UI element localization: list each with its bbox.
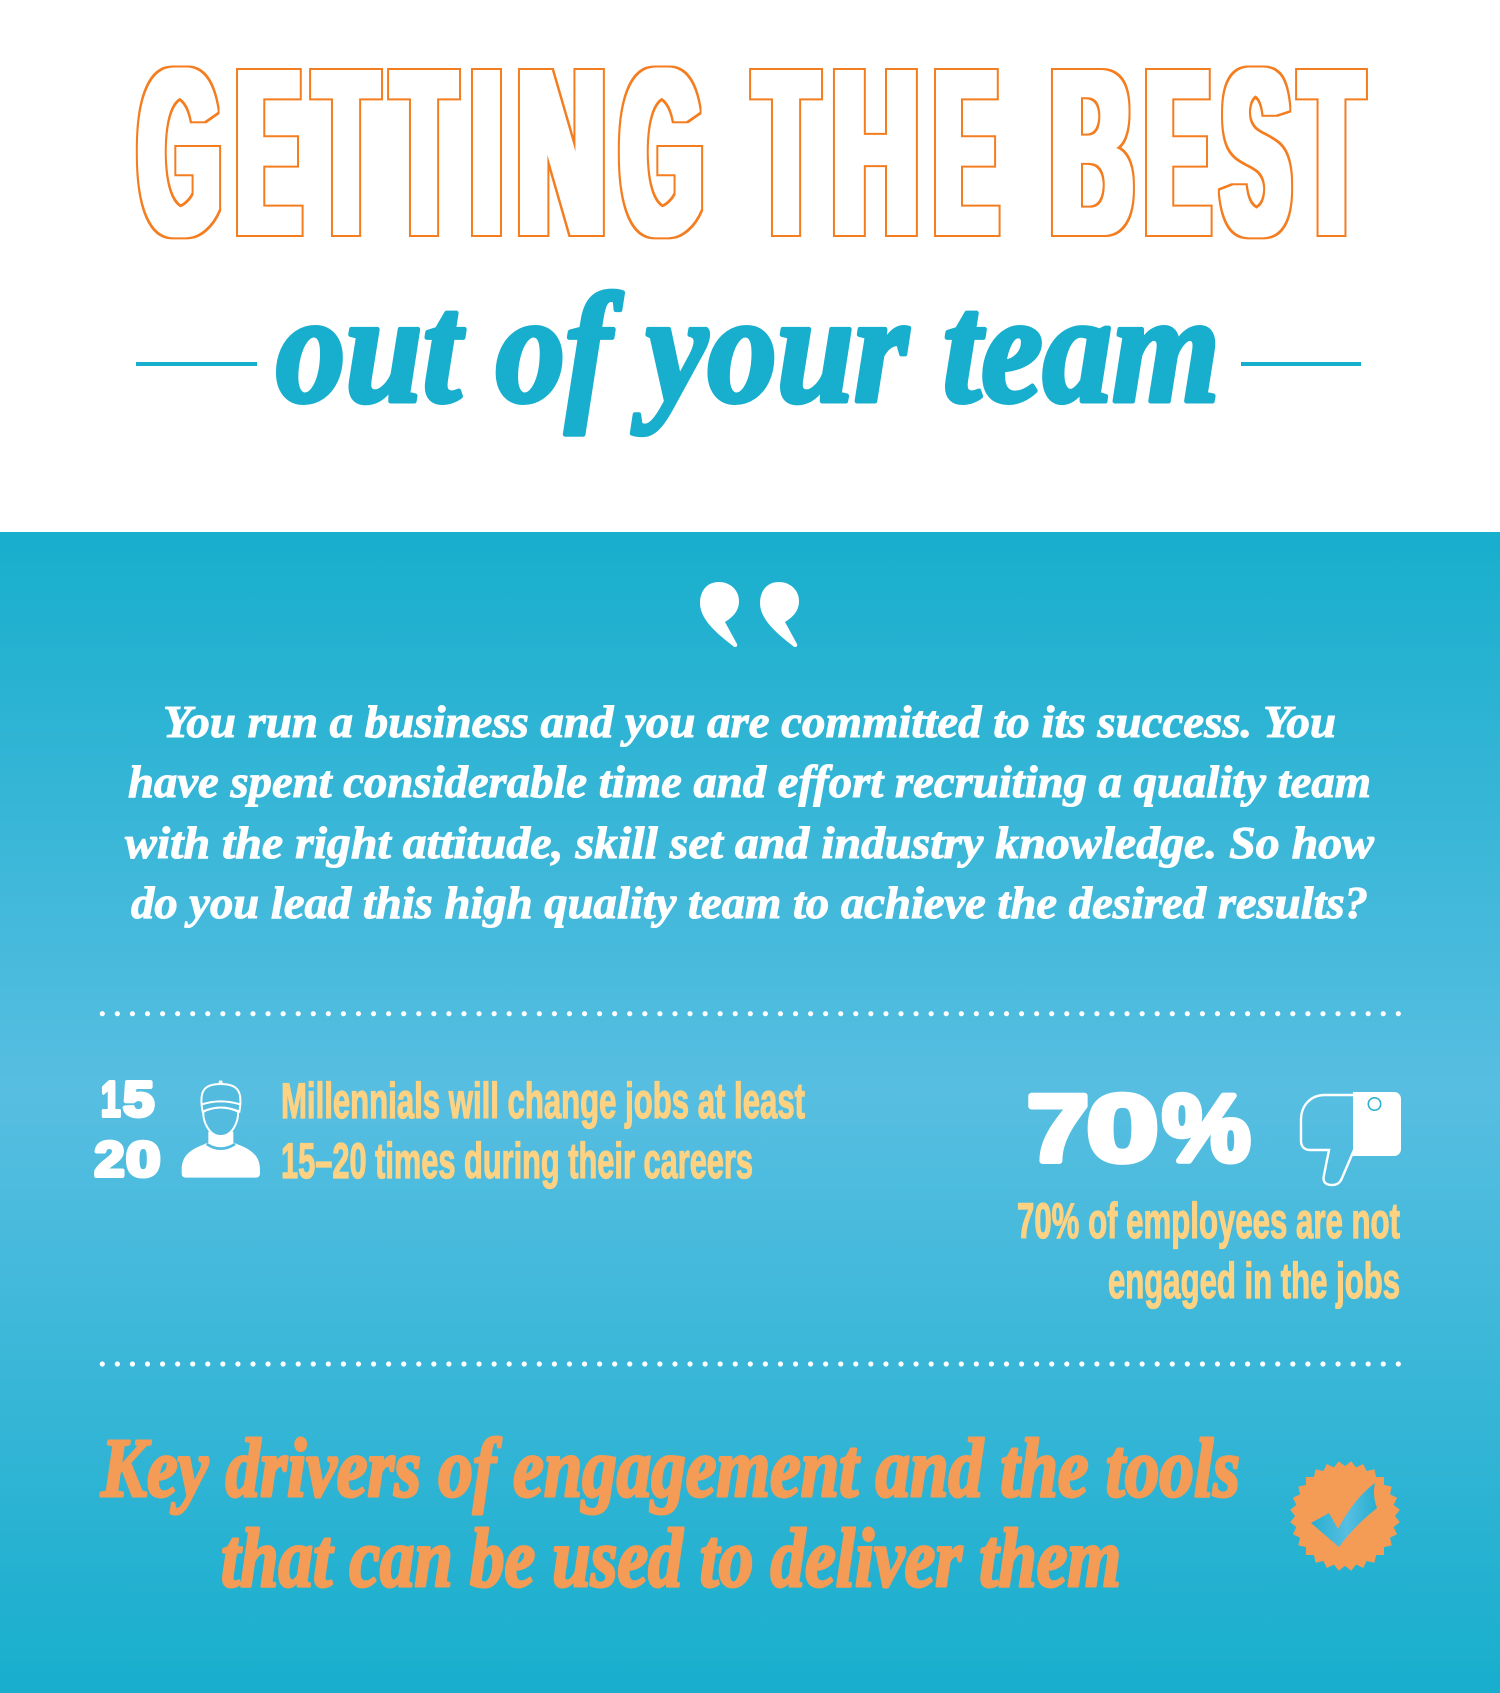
title: getting the best: I [472, 20, 501, 285]
subtitle: out of your team: out of your team [276, 262, 1220, 435]
stat: 15-20 numbers: 5 [123, 1073, 154, 1127]
title: getting the best: E [1147, 20, 1208, 285]
text: T [1302, 20, 1361, 285]
title: getting the best: T [756, 20, 816, 285]
stat: 70 percent: 0 [1087, 1076, 1159, 1182]
title: getting the best: H [833, 20, 918, 285]
icon: thumbs down [1301, 1092, 1401, 1185]
title: getting the best: E [936, 20, 996, 285]
panel: blue gradient background [0, 532, 1500, 1693]
title: getting the best: S [1223, 20, 1289, 285]
text block: millennials [281, 1073, 805, 1189]
stat: 15-20 numbers: 1 [101, 1073, 120, 1127]
title: getting the best: G [140, 20, 220, 285]
text block: introduction: with the right attitude, skill set and industry knowledge. So how [125, 817, 1374, 868]
title: getting the best: G [622, 20, 702, 285]
stat: 15-20 numbers: 2 [94, 1133, 124, 1187]
icon: person with cap [182, 1080, 260, 1178]
title: getting the best: B [1052, 20, 1132, 285]
text block: introduction [125, 696, 1374, 928]
text block: introduction: have spent considerable time and effort recruiting a quality team [128, 756, 1371, 807]
text block: employees [1017, 1193, 1400, 1309]
text block: millennials: Millennials will change jobs at least [281, 1073, 805, 1129]
stat: 70 percent: 7 [1027, 1076, 1089, 1182]
stat: 15-20 numbers: 0 [126, 1133, 160, 1187]
stat: 70 percent: % [1162, 1076, 1250, 1182]
stat: 15-20 numbers [94, 1073, 160, 1187]
title: getting the best: T [316, 20, 376, 285]
text block: millennials: 15–20 times during their careers [281, 1133, 753, 1189]
title: getting the best: E [238, 20, 299, 285]
title: getting the best [140, 20, 1361, 285]
icon: check badge [1290, 1461, 1400, 1571]
title: getting the best: T [394, 20, 454, 285]
icon: quotation marks [700, 582, 799, 647]
heading: key drivers: that can be used to deliver them [221, 1512, 1121, 1605]
text block: introduction: You run a business and you are committed to its success. You [163, 696, 1336, 747]
text block: introduction: do you lead this high quality team to achieve the desired results? [131, 877, 1368, 928]
heading: key drivers: Key drivers of engagement and the tools [100, 1422, 1240, 1515]
heading: key drivers [100, 1422, 1240, 1605]
title: getting the best: N [518, 20, 605, 285]
